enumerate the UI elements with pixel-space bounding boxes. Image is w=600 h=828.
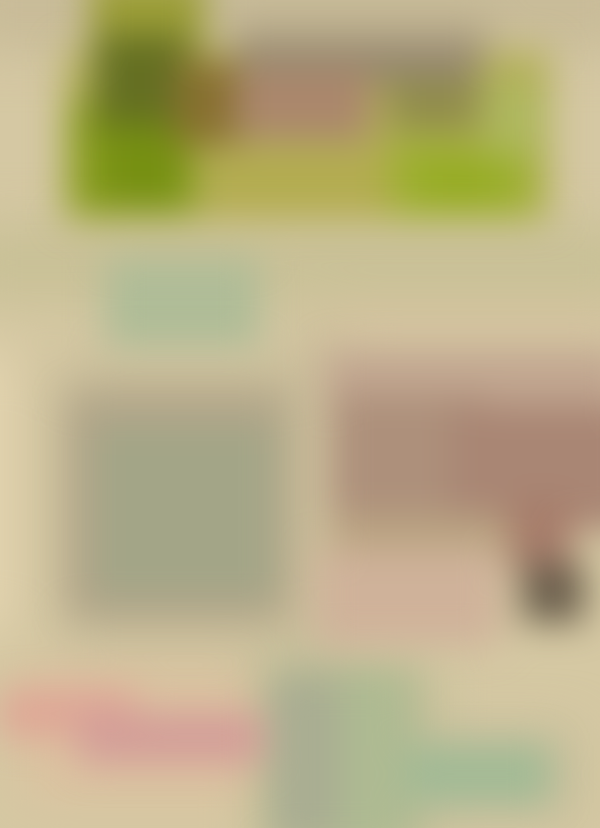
- panel: green right extension: [405, 745, 550, 803]
- panel: pale green box: [105, 258, 260, 348]
- panel: mauve connector: [510, 500, 572, 572]
- panel: green bottom block: [272, 675, 410, 828]
- panel: lower olive band: [205, 150, 400, 215]
- panel: mauve box: [325, 350, 600, 530]
- panel: grey top strip: [240, 45, 480, 130]
- panel: pink band: [0, 688, 263, 764]
- panel: middle brown block: [175, 60, 240, 145]
- panel: right green block: [390, 85, 540, 215]
- icon: dark figure: [522, 564, 584, 622]
- panel: left green block: [68, 35, 195, 215]
- panel: grey-green box: [72, 397, 282, 615]
- panel: tan box: [315, 515, 510, 645]
- panel: top banner base: [65, 0, 550, 220]
- panel: pink centre block: [235, 70, 370, 140]
